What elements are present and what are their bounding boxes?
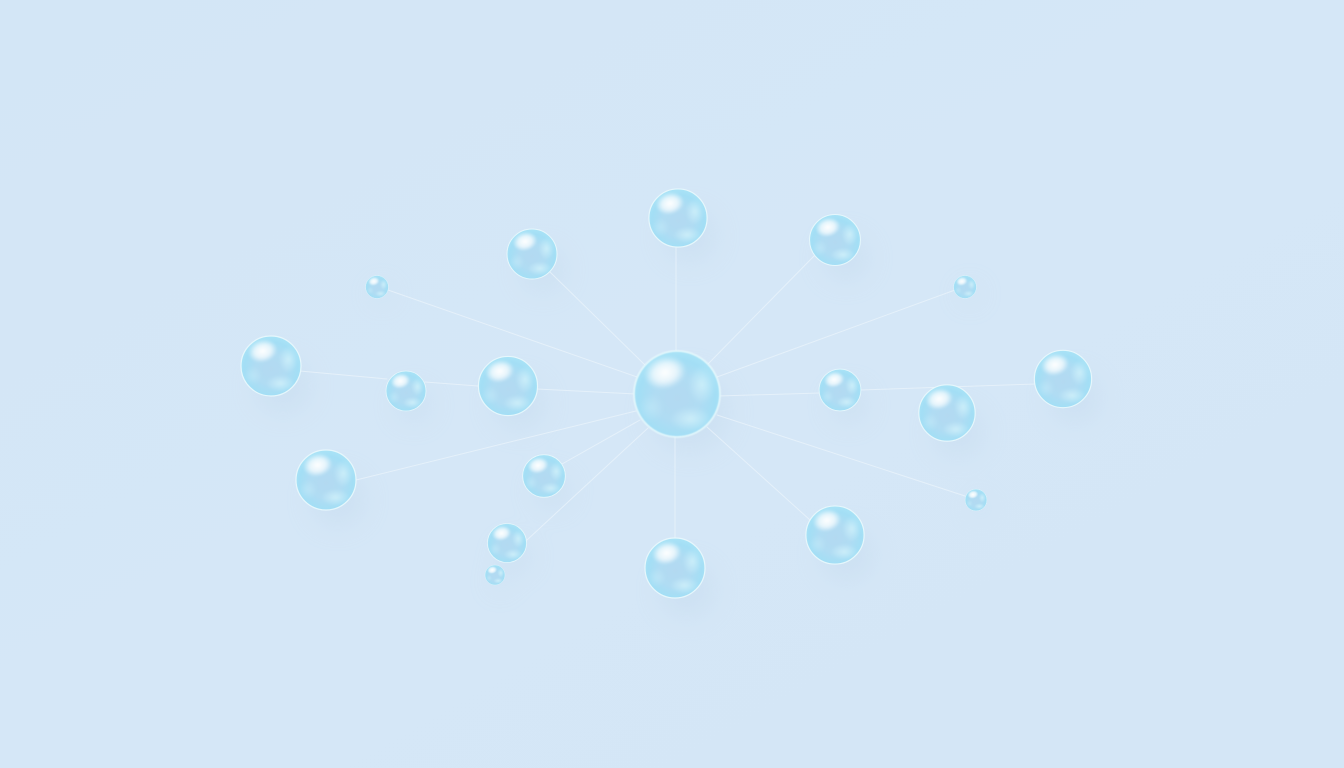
bubble: lower right — [806, 506, 864, 564]
bubble: left inner small — [386, 371, 426, 411]
bubble: upper right — [809, 214, 861, 266]
bubble: far right — [1034, 350, 1092, 408]
bubble: small far upper right — [953, 275, 977, 299]
bubble: central hub — [634, 351, 720, 437]
bubble: small lower right — [965, 489, 987, 511]
bubble shadows — [256, 210, 1100, 617]
bubble: far left — [241, 336, 301, 396]
bubble: bottom left — [487, 523, 527, 563]
bubble: right middle — [919, 385, 975, 441]
bubble: left inner — [478, 356, 538, 416]
bubble: bottom left tiny — [485, 565, 505, 585]
bubble: top — [649, 189, 707, 247]
bubble: right inner small — [819, 369, 861, 411]
bubble: lower left — [296, 450, 356, 510]
connector lines — [300, 240, 1036, 540]
bubble: upper left — [507, 229, 557, 279]
bubble: bottom — [645, 538, 705, 598]
bubble: lower left inner — [522, 454, 566, 498]
bubble: small far upper left — [365, 275, 389, 299]
